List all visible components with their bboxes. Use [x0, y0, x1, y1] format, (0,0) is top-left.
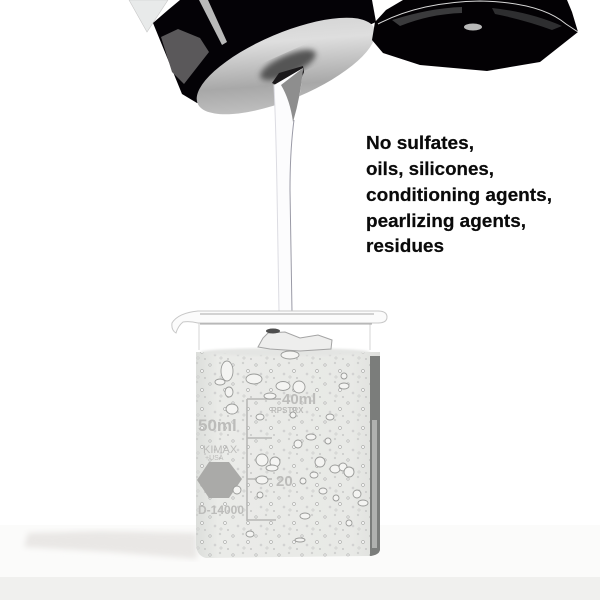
line: oils, silicones: oils, silicones,	[366, 158, 494, 179]
bottle	[129, 0, 387, 134]
rim	[172, 311, 387, 333]
cap outer	[372, 0, 578, 71]
glass right edge highlight	[372, 420, 377, 548]
table front edge	[0, 577, 600, 600]
bottle cap body	[153, 0, 376, 103]
liquid	[196, 352, 380, 558]
beaker shadow	[24, 531, 197, 559]
cap white rim	[378, 1, 578, 32]
face shadow around nozzle	[257, 44, 319, 86]
Pyrex label: RPSTRX	[271, 406, 304, 415]
cap center dot	[464, 24, 482, 30]
line: residues: residues	[366, 235, 444, 256]
stream right edge	[290, 120, 294, 312]
line: conditioning agents: conditioning agents,	[366, 184, 552, 205]
cap side reflection	[161, 29, 209, 84]
rim inner line	[200, 314, 374, 324]
table top surface	[0, 525, 600, 577]
scale markings	[247, 399, 281, 521]
gel pile on surface	[258, 332, 332, 351]
20 label: 20	[276, 473, 293, 490]
bubbles	[215, 351, 368, 542]
stream left edge	[274, 85, 279, 312]
dispensing face	[185, 0, 387, 134]
flip cap	[372, 0, 578, 71]
liquid top surface	[200, 348, 370, 356]
bottle clear neck	[129, 0, 168, 32]
50ml label: 50ml	[198, 416, 237, 435]
stream shading	[281, 68, 303, 122]
cap inner sheen	[392, 7, 462, 26]
40ml label: 40ml	[282, 391, 316, 408]
nozzle opening	[272, 66, 304, 90]
gel pile dark spot	[266, 328, 280, 334]
stream body	[274, 68, 303, 312]
Kimax label: KIMAX	[203, 444, 238, 456]
beaker	[172, 311, 387, 558]
glass dark right edge	[370, 356, 380, 556]
gel stream	[274, 68, 303, 312]
callout text	[366, 132, 552, 256]
hexagon logo	[197, 462, 242, 498]
glass upper walls	[199, 322, 370, 350]
small bubbles texture	[196, 352, 372, 558]
cap highlight	[199, 0, 227, 45]
line: pearlizing agents: pearlizing agents,	[366, 210, 526, 231]
line: No sulfates: No sulfates,	[366, 132, 474, 153]
USA label: +USA	[205, 455, 224, 462]
14000 label: D-14000	[198, 503, 244, 517]
